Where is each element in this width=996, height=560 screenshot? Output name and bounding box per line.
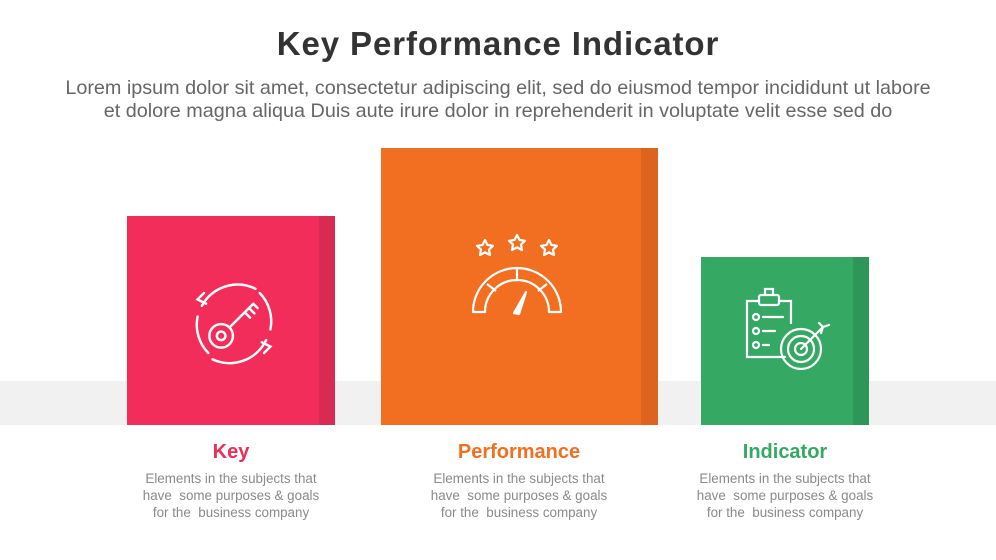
label: key: Key: [213, 441, 249, 463]
panel: key: [127, 216, 335, 425]
text: performance: Elements in the subjects that: [433, 471, 605, 486]
label: indicator: Indicator: [743, 441, 827, 463]
text: key: [143, 471, 319, 520]
icon: key: [196, 283, 272, 364]
icon: gauge: [472, 234, 562, 316]
text: key: have some purposes & goals: [143, 488, 319, 503]
label: performance: Performance: [458, 441, 580, 463]
text: indicator: for the business company: [707, 505, 863, 520]
text: key: for the business company: [153, 505, 309, 520]
title: Key Performance Indicator: [277, 25, 719, 62]
text: indicator: [697, 471, 873, 520]
panel: indicator: [701, 257, 869, 425]
text: key: Elements in the subjects that: [145, 471, 317, 486]
text: performance: for the business company: [441, 505, 597, 520]
text: performance: [431, 471, 607, 520]
subtitle: Lorem ipsum dolor sit amet, consectetur adipiscing elit, sed do eiusmod tempor incididunt ut labore: [65, 77, 931, 99]
text: performance: have some purposes & goals: [431, 488, 607, 503]
text: indicator: have some purposes & goals: [697, 488, 873, 503]
subtitle: et dolore magna aliqua Duis aute irure dolor in reprehenderit in voluptate velit esse sed do: [104, 100, 892, 122]
icon: clipboard target: [746, 288, 830, 370]
panel: performance: [381, 148, 658, 425]
text: indicator: Elements in the subjects that: [699, 471, 871, 486]
subtitle: [65, 77, 931, 122]
